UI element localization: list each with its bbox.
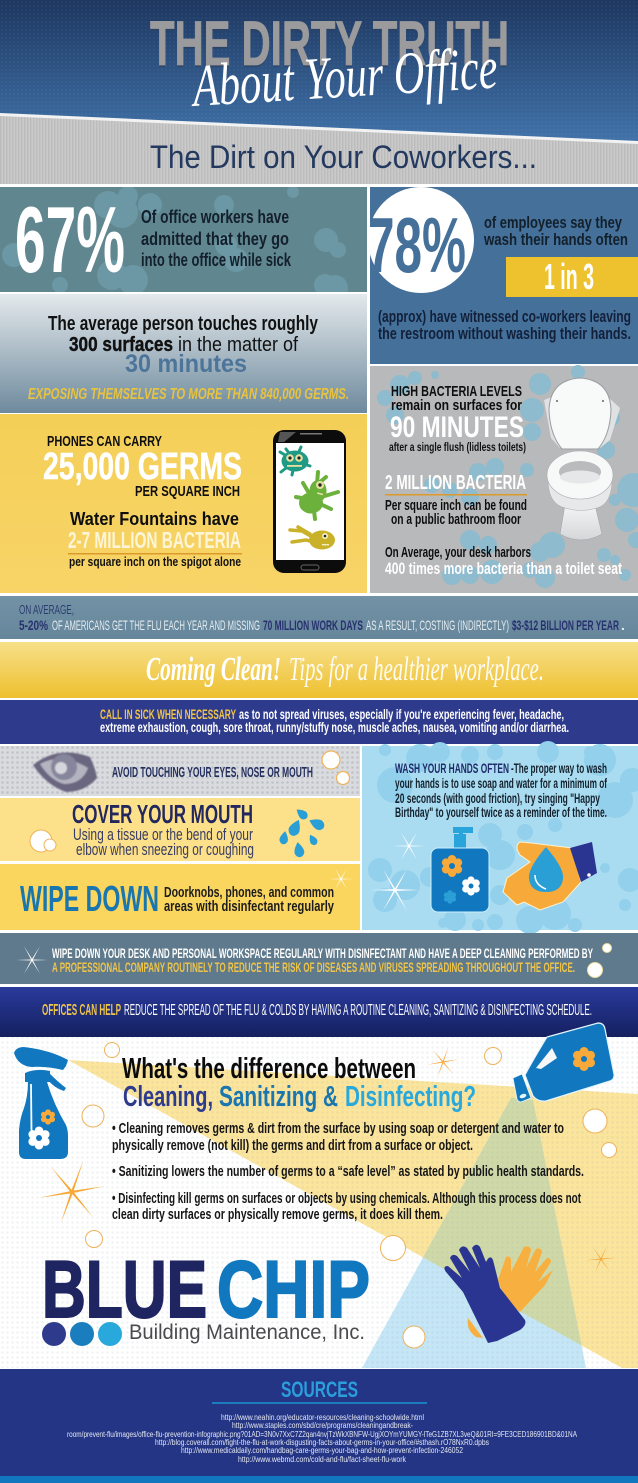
text block: 90 MINUTES: [390, 411, 524, 444]
icon: toilet: [544, 378, 620, 540]
text block: [385, 544, 622, 578]
icon: eye: [33, 752, 97, 792]
text block: 2-7 MILLION BACTERIA: [68, 527, 241, 553]
icon: sparkles: [371, 832, 425, 911]
text block: [385, 472, 527, 528]
text line: OF AMERICANS GET THE FLU EACH YEAR AND MISSING: [52, 617, 260, 633]
text line: OFFICES CAN HELP: [42, 1002, 121, 1019]
panel: wash your hands: [362, 741, 638, 934]
text line: ON AVERAGE,: [19, 602, 74, 617]
icon: bubbles: [588, 944, 612, 978]
heading: COVER YOUR MOUTH: [72, 799, 253, 829]
icon: soap dispenser: [431, 827, 489, 912]
text block: [395, 761, 607, 820]
panel: 67 percent: [0, 186, 367, 301]
icon: bubbles: [82, 1042, 616, 1348]
icon: hand with drop: [503, 842, 597, 910]
section heading: The Dirt on Your Coworkers...: [150, 139, 537, 175]
text block: on a public bathroom floor: [391, 511, 521, 528]
icon: bubbles: [322, 751, 350, 784]
text block: PER SQUARE INCH: [135, 483, 240, 500]
icon: spray bottle: [14, 1047, 68, 1159]
panel: cover your mouth: [0, 798, 360, 861]
logo: Blue Chip: Building Maintenance, Inc.: [129, 1321, 365, 1344]
text block: 2 MILLION BACTERIA: [385, 472, 526, 494]
text block: HIGH BACTERIA LEVELS: [391, 383, 522, 400]
text block: [52, 945, 593, 975]
text block: 300 surfaces: [69, 334, 173, 356]
text block: [164, 884, 334, 915]
text block: definitions: [112, 1121, 584, 1223]
icon: green germ: [296, 472, 338, 519]
icon: gloves: [444, 1245, 553, 1343]
stat: 67%: 67%: [15, 187, 125, 292]
panel: flu statistic band: [0, 596, 638, 639]
panel: call in sick: [0, 700, 638, 744]
source links: http://www.neahin.org/educator-resources/cleaning-schoolwide.html: [221, 1413, 424, 1422]
heading: SOURCES: [281, 1377, 358, 1402]
text line: [19, 617, 625, 633]
panel: phones and fountains: [0, 414, 367, 593]
text block: WASH YOUR HANDS OFTEN: [395, 761, 509, 776]
panel: 78 percent: [367, 187, 638, 364]
panel: cleaning sanitizing disinfecting: [0, 1023, 638, 1368]
text block: elbow when sneezing or coughing: [76, 841, 254, 859]
banner: Coming Clean: [0, 642, 638, 698]
stat: 30 minutes: 30 minutes: [125, 350, 247, 378]
text block: [73, 826, 254, 859]
callout: 1 in 3: [506, 256, 638, 297]
text line: AS A RESULT, COSTING (INDIRECTLY): [366, 617, 509, 633]
text block: 25,000 GERMS: [43, 446, 242, 488]
text block: Water Fountains have: [70, 509, 239, 529]
text block: admitted that they go: [141, 229, 289, 249]
beam: yellow spray: [68, 1060, 638, 1368]
text line: 5-20%: [19, 617, 48, 633]
text block: [141, 207, 292, 270]
heading: Cleaning,: [123, 1081, 213, 1113]
heading: [122, 1053, 476, 1113]
heading: What's the difference between: [122, 1053, 416, 1085]
source links: http://www.medicaldaily.com/handbag-care-germs-your-bag-and-how-prevent-infection-246052: [181, 1446, 463, 1455]
text line: 70 MILLION WORK DAYS: [263, 617, 363, 633]
heading: Coming Clean!: [146, 651, 281, 688]
text line: AVOID TOUCHING YOUR EYES, NOSE OR MOUTH: [112, 765, 313, 781]
text block: [483, 213, 628, 249]
beam: blue light: [362, 1098, 586, 1368]
panel: avoid touching eyes: [0, 746, 360, 796]
header banner: [0, 0, 638, 143]
subtitle: About Your Office: About Your Office: [188, 34, 499, 119]
text block: Of office workers have: [141, 207, 289, 227]
heading: [146, 651, 544, 688]
text block: areas with disinfectant regularly: [164, 898, 334, 915]
text block: per square inch on the spigot alone: [69, 554, 241, 569]
text block: Per square inch can be found: [385, 497, 527, 514]
icon: sparkle: [16, 946, 48, 974]
text block: in the matter of: [178, 334, 298, 356]
text block: after a single flush (lidless toilets): [389, 440, 526, 454]
text block: into the office while sick: [141, 250, 292, 270]
footer bar: [0, 1476, 638, 1483]
panel: wipe down: [0, 864, 360, 930]
panel: 300 surfaces: [0, 294, 367, 413]
white circle with stat: [367, 187, 474, 293]
panel: bacteria on toilets: [370, 365, 638, 593]
text block: definitions: physically remove (not kill) the germs and dirt from a surface or object.: [112, 1138, 473, 1154]
text block: [69, 334, 298, 356]
icon: yellow germ: [290, 527, 335, 550]
source links: http://www.webmd.com/cold-and-flu/fact-sheet-flu-work: [238, 1455, 407, 1464]
heading: Sanitizing &: [219, 1081, 338, 1113]
text block: Using a tissue or the bend of your: [73, 826, 253, 844]
icon: teal germ: [280, 447, 310, 475]
section band: The Dirt on Your Coworkers: [0, 113, 638, 184]
text block: definitions: clean dirty surfaces or physically remove germs, it does kill them.: [112, 1207, 443, 1223]
icon: water drops: [279, 806, 326, 858]
icon: bubbles: [30, 830, 56, 852]
icon: sparkle: [329, 869, 353, 889]
icon: orange sparkles: [35, 1046, 617, 1273]
icon: phone with germs: [273, 430, 346, 573]
text block: [378, 307, 631, 343]
text block: CALL IN SICK WHEN NECESSARY: [100, 707, 236, 722]
source links: [67, 1413, 578, 1464]
source links: http://blog.coverall.com/fight-the-flu-at-work-disgusting-facts-about-germs-in-your-office/#sthash.rO78NxR0.dpbs: [155, 1438, 489, 1447]
callout: 1 in 3: 1 in 3: [544, 256, 594, 297]
logo: Blue Chip: CHIP: [217, 1245, 370, 1335]
heading: WIPE DOWN: [20, 878, 159, 919]
text block: The average person touches roughly: [48, 313, 319, 335]
white circle with stat: 78%: [367, 201, 466, 289]
panel: sources: [0, 1369, 638, 1476]
panel: offices can help: [0, 987, 638, 1037]
text block: [389, 383, 526, 454]
text block: [68, 509, 242, 569]
logo: Blue Chip: [42, 1245, 370, 1346]
yellow caption: EXPOSING THEMSELVES TO MORE THAN 840,000 GERMS.: [28, 386, 349, 403]
text block: remain on surfaces for: [391, 397, 522, 414]
source links: http://www.staples.com/sbd/cre/programs/cleaningandbreak-: [232, 1421, 413, 1430]
text block: On Average, your desk harbors: [385, 544, 531, 561]
text block: Doorknobs, phones, and common: [164, 884, 334, 901]
icon: jug: [513, 1023, 614, 1102]
text line: .: [621, 617, 625, 633]
text block: [43, 433, 242, 500]
text block: [100, 707, 569, 735]
heading: Disinfecting?: [345, 1081, 476, 1113]
logo: Blue Chip: BLUE: [42, 1245, 207, 1335]
text block: PHONES CAN CARRY: [47, 433, 162, 450]
panel: desk cleaning band: [0, 933, 638, 984]
